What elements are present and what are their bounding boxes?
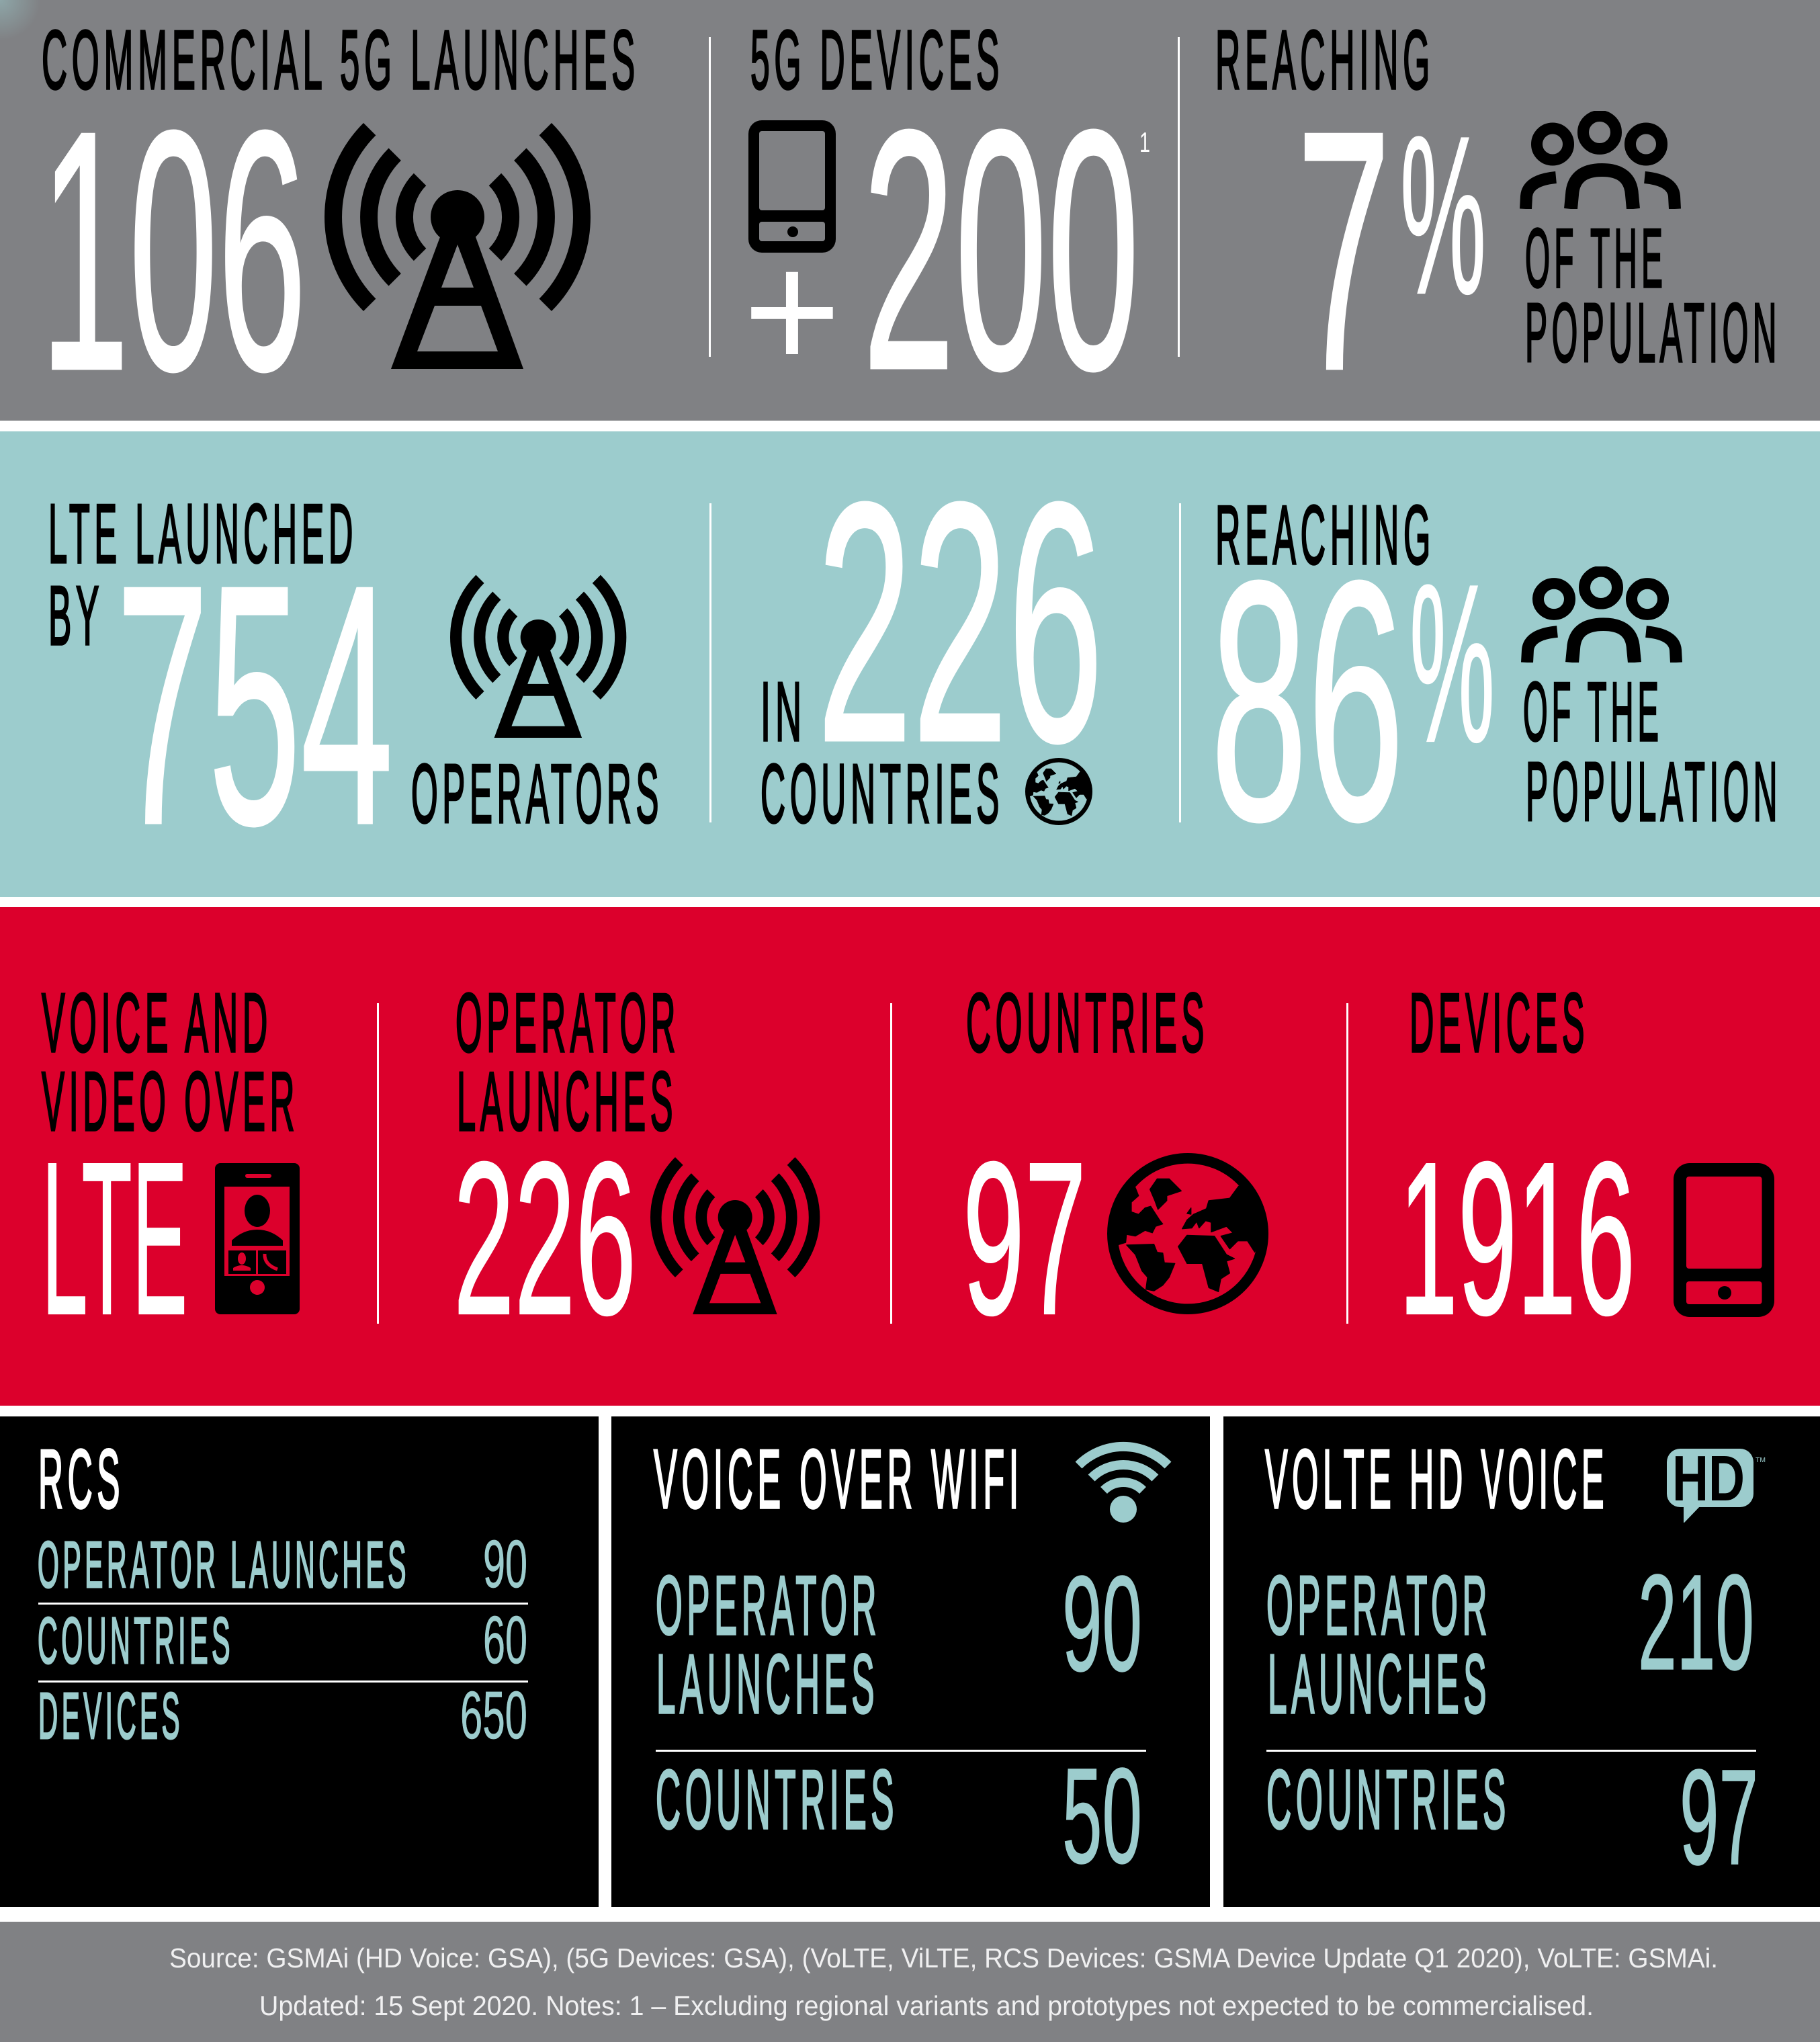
icon: smartphone xyxy=(748,120,836,253)
source line: Source: GSMAi (HD Voice: GSA), (5G Devices: GSA), (VoLTE, ViLTE, RCS Devices: GSMA Device Update Q1 2020), VoLTE: GSMAi. xyxy=(169,1943,1718,1973)
row: operator launches 90 xyxy=(656,1547,1142,1730)
icon: radio tower xyxy=(656,1161,814,1314)
heading: voice and video over xyxy=(42,976,299,1148)
panel: voice over wifi xyxy=(611,1416,1210,1907)
heading: operator launches xyxy=(456,976,680,1148)
heading: LTE launched by xyxy=(48,486,357,662)
panel: voice and video over LTE row xyxy=(0,907,1820,1406)
updated and notes line: Updated: 15 Sept 2020. Notes: 1 – Excluding regional variants and prototypes not expected to be commercialised. xyxy=(259,1990,1594,2021)
icon: smartphone xyxy=(1674,1163,1774,1317)
icon: globe xyxy=(1112,1158,1264,1309)
panel: LTE row: IN xyxy=(761,665,806,758)
row: operator launches 90 xyxy=(38,1526,527,1601)
text: 60 xyxy=(483,1602,527,1677)
number: 7 percent xyxy=(1297,60,1486,441)
plus sign: + xyxy=(743,217,841,405)
text: 90 xyxy=(1062,1547,1142,1699)
text: DEVICES xyxy=(38,1679,183,1752)
row: countries 60 xyxy=(38,1602,527,1677)
icon: people xyxy=(1526,116,1675,209)
label: of the population xyxy=(1523,665,1782,838)
icon: wifi xyxy=(1079,1447,1168,1523)
heading: LTE launched by: BY xyxy=(48,568,103,662)
text: 90 xyxy=(483,1526,527,1601)
row: operator launches 210 xyxy=(1266,1546,1754,1730)
panel: RCS xyxy=(0,1416,599,1907)
row: countries 50 xyxy=(656,1740,1142,1891)
panel: VoLTE HD voice xyxy=(1223,1416,1820,1907)
text: 50 xyxy=(1062,1740,1142,1891)
label: of the population xyxy=(1525,211,1781,379)
text: 650 xyxy=(460,1677,527,1752)
panel: RCS: RCS xyxy=(38,1432,124,1525)
icon: HD voice speech bubble: HD xyxy=(1672,1443,1745,1515)
row: devices 650 xyxy=(38,1677,527,1752)
number: 86 percent xyxy=(1211,511,1495,891)
icon: globe xyxy=(1027,760,1091,823)
icon: people xyxy=(1527,571,1676,663)
panel: source footer xyxy=(0,1922,1820,2042)
footnote marker 1: 1 xyxy=(1139,126,1150,158)
icon: radio tower xyxy=(333,129,582,369)
icon: HD voice speech bubble: TM xyxy=(1756,1457,1766,1464)
icon: video call phone xyxy=(215,1163,300,1314)
icon: radio tower xyxy=(456,579,621,738)
panel: voice and video over LTE row: LTE xyxy=(42,1117,187,1360)
row: countries 97 xyxy=(1266,1741,1758,1893)
